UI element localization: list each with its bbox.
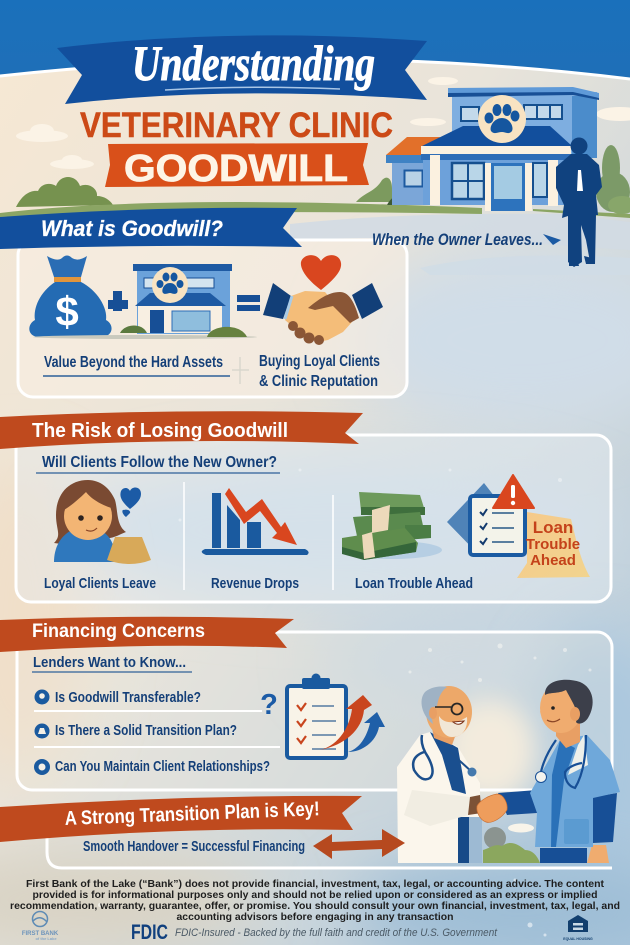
fdic [131, 921, 498, 944]
question list [34, 690, 280, 775]
fdic: FDIC [131, 921, 168, 944]
sticky note: Ahead [530, 552, 576, 569]
transition banner: A Strong Transition Plan is Key! [64, 798, 320, 830]
disclaimer: recommendation, warranty, guarantee, offer, or promise. You should consult your own financial, investment, tax, legal, and [10, 900, 620, 912]
sky [0, 0, 630, 79]
younger head [540, 680, 593, 748]
tree right [596, 145, 630, 214]
left bush [16, 177, 113, 207]
warning triangle [493, 475, 534, 508]
sticky note: Trouble [526, 536, 580, 553]
label: loan trouble ahead: Loan Trouble Ahead [355, 575, 473, 592]
label: revenue drops: Revenue Drops [211, 575, 299, 592]
title: goodwill banner: GOODWILL [124, 148, 348, 190]
financing panel [17, 632, 612, 790]
disclaimer: First Bank of the Lake (“Bank”) does not provide financial, investment, tax, legal, or accounting advice. The content [26, 878, 605, 890]
sticky note: Loan [533, 518, 573, 537]
risk banner [0, 411, 363, 449]
icon: money bag: $ [55, 288, 79, 335]
owner silhouette [556, 138, 602, 267]
sticky note [517, 512, 590, 578]
icon: clipboard with arrows [287, 674, 385, 758]
risk banner: The Risk of Losing Goodwill [32, 420, 288, 442]
logo: first bank [22, 912, 59, 941]
icon: question mark: ? [260, 689, 278, 721]
older veterinarian [397, 686, 482, 863]
icon: cash stacks [342, 492, 442, 560]
icon: client girl [54, 480, 151, 564]
label: buying loyal clients: & Clinic Reputation [259, 373, 378, 390]
icon: equal housing lender [563, 915, 593, 941]
logo: first bank: of the Lake [35, 936, 57, 941]
question 1: Is Goodwill Transferable? [55, 690, 201, 706]
label: value beyond: Value Beyond the Hard Assets [44, 354, 223, 371]
roof [422, 126, 572, 146]
double arrow [313, 829, 405, 859]
risk panel [16, 435, 611, 602]
icon: mini clinic [33, 264, 257, 339]
upper block [452, 92, 597, 158]
mini paw [152, 267, 188, 303]
what is goodwill panel [18, 240, 407, 397]
title banner [57, 35, 427, 104]
clinic building [386, 87, 599, 211]
label: buying loyal clients: Buying Loyal Clients [259, 353, 380, 370]
chart: revenue drops [202, 488, 309, 555]
icon: money bag [29, 256, 112, 337]
older head [422, 686, 472, 745]
transition panel [47, 825, 612, 868]
icon: handshake between vets [477, 794, 507, 822]
title: veterinary clinic: VETERINARY CLINIC [80, 106, 393, 145]
transition banner [0, 796, 362, 842]
road [290, 214, 630, 250]
icon: plus [108, 291, 128, 311]
paw sign [478, 95, 526, 143]
bushes by clinic [356, 178, 423, 205]
icon: heart and handshake [263, 255, 383, 345]
orange side wing [386, 137, 440, 155]
icon: equal housing lender: EQUAL HOUSING [563, 937, 593, 941]
icon: equals [237, 295, 260, 311]
icon: loan checklist [447, 475, 590, 578]
columns [430, 155, 440, 205]
disclaimer: provided is for informational purposes only and should not be relied upon or considered as an express or implied [32, 889, 598, 901]
ground [0, 202, 482, 217]
logo: first bank: FIRST BANK [22, 931, 59, 937]
clouds [16, 77, 630, 169]
scene behind vets [483, 824, 540, 863]
label: buying loyal clients [259, 353, 380, 390]
smooth handover: Smooth Handover = Successful Financing [83, 838, 305, 855]
lower wall [423, 160, 573, 205]
speckles [98, 468, 592, 936]
what is goodwill banner: What is Goodwill? [41, 216, 223, 241]
disclaimer [10, 878, 620, 923]
will clients heading: Will Clients Follow the New Owner? [42, 454, 277, 471]
financing banner: Financing Concerns [32, 621, 205, 642]
question 3: Can You Maintain Client Relationships? [55, 759, 270, 775]
younger veterinarian [498, 680, 620, 863]
windows [461, 107, 479, 121]
lenders want to know: Lenders Want to Know... [33, 654, 186, 671]
financing banner [0, 617, 294, 652]
title script: Understanding [132, 35, 375, 91]
when the owner leaves: When the Owner Leaves... [372, 230, 543, 249]
fdic: FDIC-Insured - Backed by the full faith and credit of the U.S. Government [175, 927, 498, 939]
disclaimer: accounting advisors before engaging in any transaction [176, 911, 454, 923]
what is goodwill banner [0, 208, 302, 249]
question 2: Is There a Solid Transition Plan? [55, 723, 237, 739]
label: loyal clients leave: Loyal Clients Leave [44, 575, 156, 592]
